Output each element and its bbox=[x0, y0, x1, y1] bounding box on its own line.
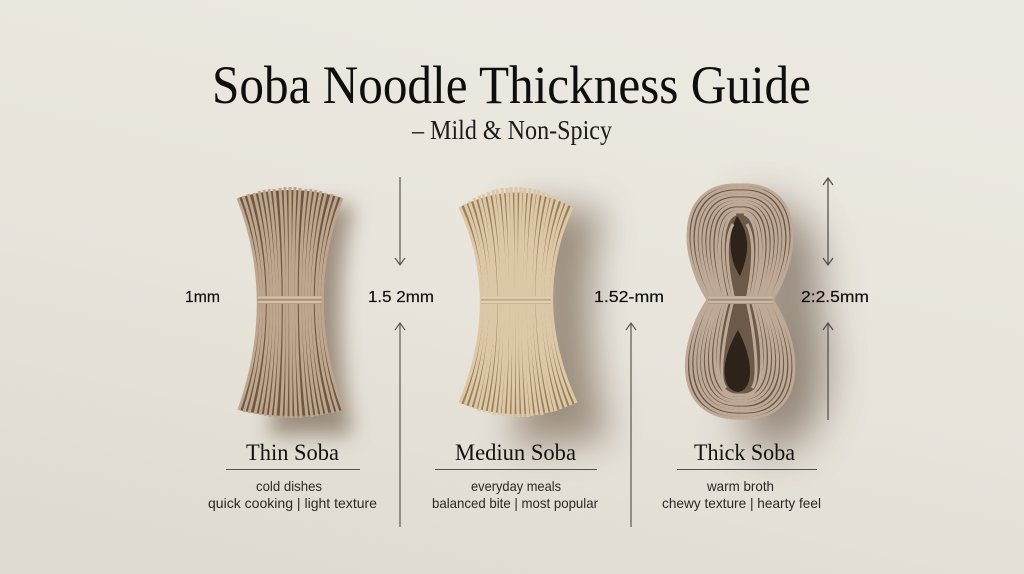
text: thick soba notes: warm broth bbox=[706, 478, 774, 494]
text: medium soba notes bbox=[432, 478, 598, 511]
text: thin soba notes: cold dishes bbox=[256, 478, 322, 494]
text: medium soba notes: everyday meals bbox=[471, 478, 561, 494]
heading: thin soba: Thin Soba bbox=[246, 440, 339, 465]
panel: thin soba bbox=[185, 177, 434, 527]
text: thin soba notes: quick cooking | light texture bbox=[208, 495, 377, 511]
text: thick soba notes bbox=[662, 478, 821, 511]
icon: thick noodle loop bundle bbox=[686, 185, 826, 450]
text: thin soba notes bbox=[208, 478, 377, 511]
arrow: thin up bbox=[395, 323, 405, 527]
label: thickness medium: 1.52-mm bbox=[594, 289, 664, 306]
text: thick soba notes: chewy texture | hearty feel bbox=[662, 495, 821, 511]
heading: medium soba: Mediun Soba bbox=[455, 440, 576, 465]
panel: medium soba bbox=[432, 187, 664, 527]
icon: medium noodle bundle bbox=[460, 187, 608, 445]
label: thickness thin right: 1.5 2mm bbox=[368, 289, 434, 306]
arrow: thin down bbox=[395, 177, 405, 265]
rule: medium soba bbox=[435, 468, 597, 470]
rule: thick soba bbox=[677, 468, 817, 470]
arrow: thick double bbox=[823, 178, 833, 265]
title: Soba Noodle Thickness Guide bbox=[212, 55, 811, 115]
label: thickness thin left: 1mm bbox=[185, 289, 220, 306]
text: medium soba notes: balanced bite | most popular bbox=[432, 495, 598, 511]
label: thickness thick: 2:2.5mm bbox=[801, 289, 869, 306]
icon: thin noodle bundle bbox=[238, 187, 354, 435]
arrow: thick up bbox=[823, 323, 833, 420]
subtitle: – Mild & Non-Spicy bbox=[411, 115, 612, 145]
heading: thick soba: Thick Soba bbox=[694, 440, 795, 465]
rule: thin soba bbox=[226, 468, 360, 470]
panel: thick soba bbox=[662, 178, 869, 511]
arrow: medium up bbox=[626, 323, 636, 527]
